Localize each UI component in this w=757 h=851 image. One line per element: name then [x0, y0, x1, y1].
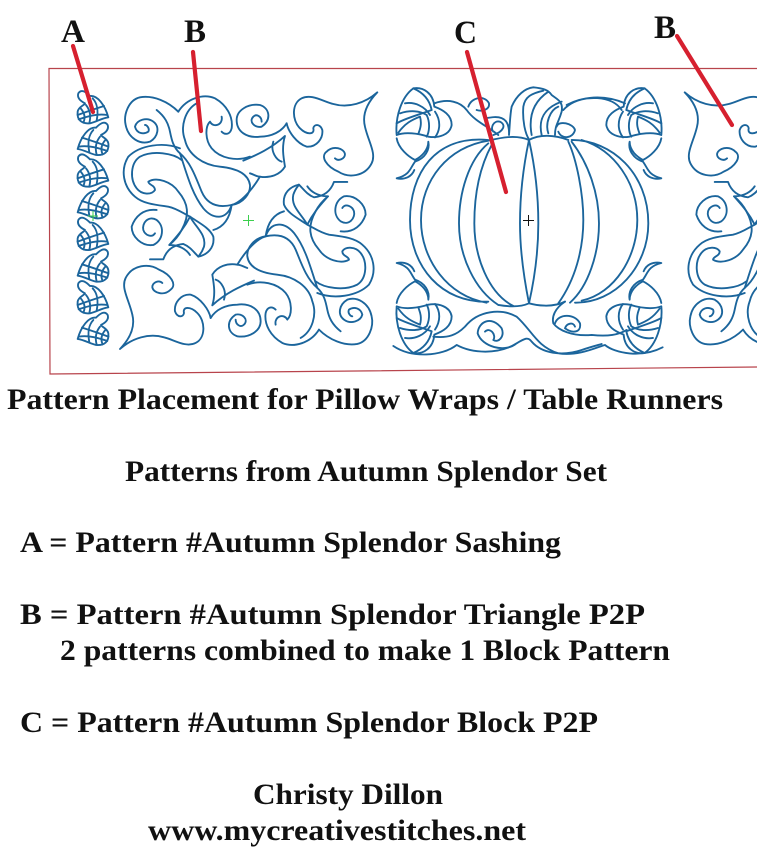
- pointer letters: C: [454, 15, 477, 51]
- pattern B: repeated block, clipped at right edge: [685, 92, 757, 349]
- pattern legend: [20, 526, 670, 739]
- title: Pattern Placement for Pillow Wraps / Table Runners: [7, 383, 723, 416]
- pointer letters: B: [184, 14, 206, 50]
- credits: www.mycreativestitches.net: [148, 814, 526, 847]
- pointer letters: B: [654, 10, 676, 46]
- pattern C: pumpkin block: [393, 87, 663, 354]
- pattern A: sashing column: [78, 91, 108, 345]
- pumpkin stem and vines: [434, 87, 625, 139]
- pointer letters: [61, 10, 676, 51]
- bottom scroll band: [393, 302, 663, 354]
- pattern frame: [49, 68, 757, 374]
- credits: [148, 778, 526, 847]
- registration crosses: [88, 211, 534, 226]
- pattern legend: A = Pattern #Autumn Splendor Sashing: [20, 526, 561, 559]
- pattern legend: C = Pattern #Autumn Splendor Block P2P: [20, 706, 598, 739]
- red pointer arrows: [73, 36, 732, 192]
- pumpkin ribs: [410, 136, 648, 306]
- pattern legend: B = Pattern #Autumn Splendor Triangle P2P: [20, 598, 645, 631]
- pointer letters: A: [61, 14, 85, 50]
- subtitle: Patterns from Autumn Splendor Set: [125, 455, 607, 488]
- credits: Christy Dillon: [253, 778, 443, 811]
- corner leaves: [396, 88, 662, 353]
- pattern B: block of two triangles: [120, 92, 377, 349]
- pattern legend: 2 patterns combined to make 1 Block Pattern: [60, 634, 670, 667]
